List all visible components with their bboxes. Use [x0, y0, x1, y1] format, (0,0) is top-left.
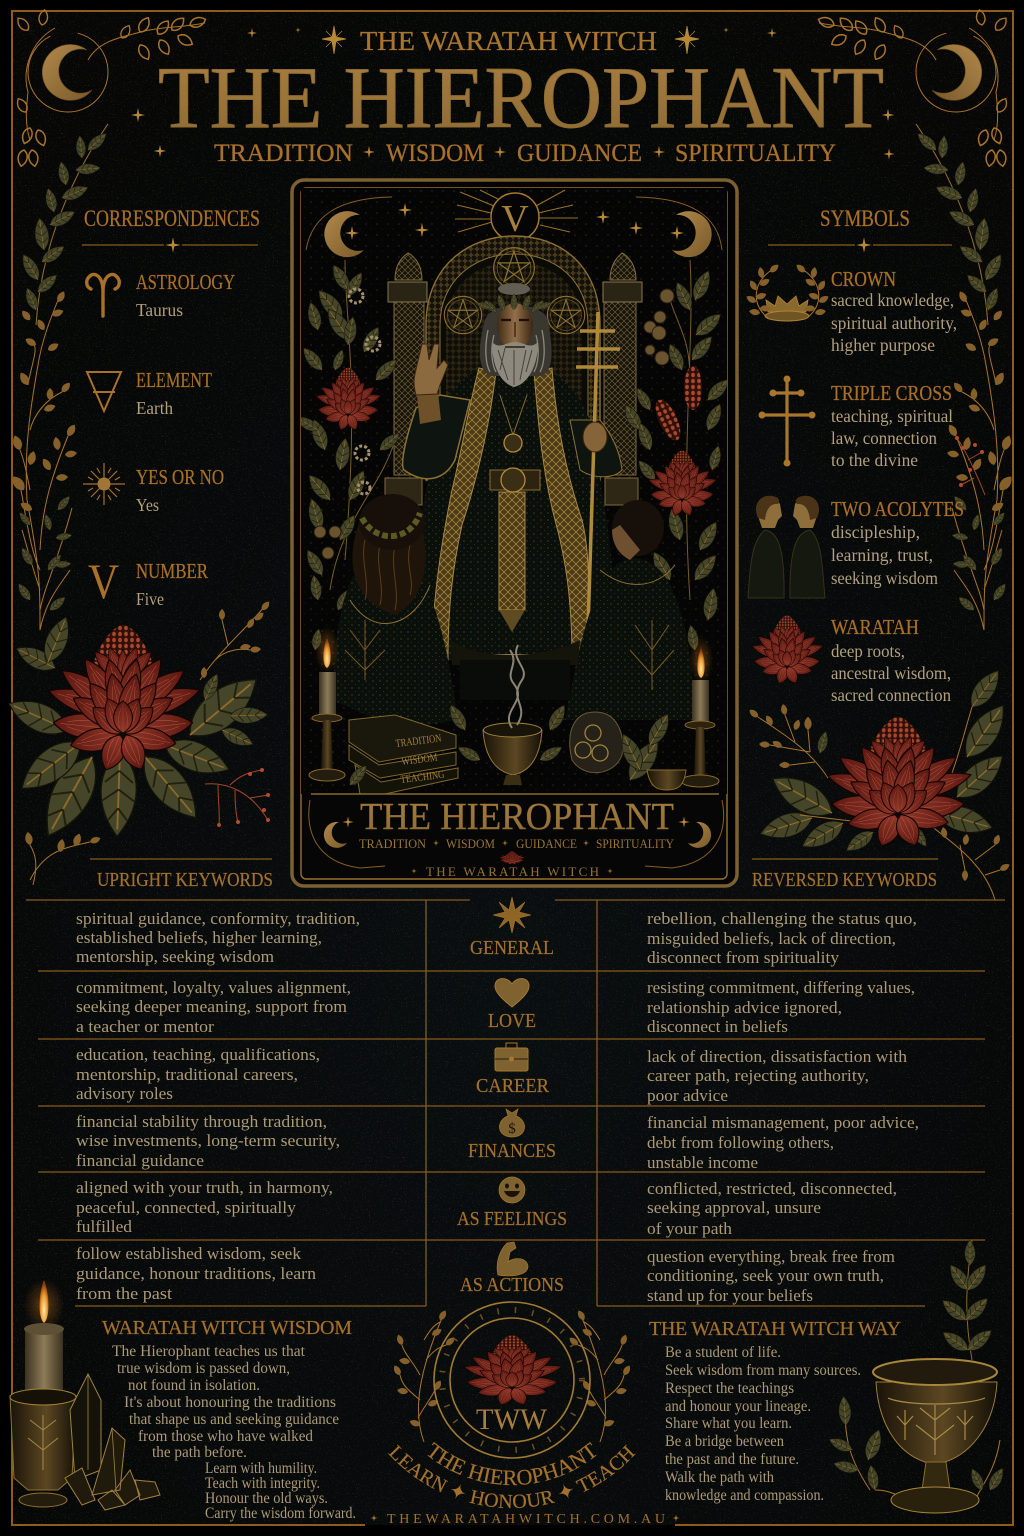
- way text: Share what you learn.: [665, 1415, 792, 1432]
- icon: crown with laurel: [745, 263, 830, 321]
- card artwork: [294, 188, 733, 794]
- tagline: TRADITION: [214, 140, 353, 167]
- card nameplate: THE HIEROPHANT: [360, 796, 674, 838]
- way text: and honour your lineage.: [665, 1398, 811, 1415]
- row: as feelings: aligned with your truth, in harmony,: [76, 1178, 333, 1197]
- heading: THE WARATAH WITCH WAY: [649, 1318, 901, 1340]
- raised hand: [414, 344, 448, 424]
- corner ornament: right moon: [817, 9, 1009, 167]
- row: finances: FINANCES: [468, 1140, 556, 1162]
- triple cross: TRIPLE CROSS: [831, 381, 952, 405]
- row: general: misguided beliefs, lack of direction,: [647, 929, 896, 948]
- bottom-right leaves and chalice: [827, 1240, 1007, 1513]
- icon: briefcase: [495, 1043, 528, 1071]
- triple cross: [831, 381, 953, 470]
- panel: waratah witch wisdom: [102, 1317, 356, 1522]
- row: finances: wise investments, long-term security,: [76, 1131, 340, 1150]
- crown: [831, 267, 957, 355]
- way text: Respect the teachings: [665, 1380, 794, 1397]
- wisdom text: The Hierophant teaches us that: [112, 1343, 306, 1360]
- throne arch: [426, 236, 600, 480]
- row: as feelings: [76, 1177, 897, 1238]
- card nameplate: [309, 796, 724, 879]
- heading: WARATAH WITCH WISDOM: [102, 1317, 352, 1339]
- icon: header star left: [322, 26, 346, 54]
- card nameplate: THE WARATAH WITCH: [426, 864, 599, 879]
- row: love: resisting commitment, differing values,: [647, 978, 915, 997]
- wisdom text: that shape us and seeking guidance: [129, 1411, 339, 1428]
- row: general: rebellion, challenging the status quo,: [647, 909, 917, 928]
- astrology: ASTROLOGY: [136, 270, 235, 294]
- stacked books: WISDOM: [401, 752, 438, 768]
- foliage left: [301, 260, 399, 650]
- panel: reversed keywords heading: REVERSED KEYWORDS: [752, 869, 937, 891]
- two acolytes: TWO ACOLYTES: [831, 497, 964, 521]
- panel: upright keywords heading: UPRIGHT KEYWORDS: [97, 869, 273, 891]
- tagline: GUIDANCE: [517, 140, 642, 167]
- number: Five: [136, 589, 164, 609]
- header: [158, 26, 884, 167]
- tarot card: [292, 180, 737, 886]
- row: general: GENERAL: [470, 937, 554, 959]
- two acolytes: [831, 497, 964, 588]
- waratah: ancestral wisdom,: [831, 663, 951, 683]
- row: as feelings: conflicted, restricted, disconnected,: [647, 1179, 897, 1198]
- row: finances: financial mismanagement, poor advice,: [647, 1113, 919, 1132]
- row: general: established beliefs, higher learning,: [76, 928, 322, 947]
- icon: aries: [87, 274, 119, 316]
- triple cross: law, connection: [831, 428, 937, 448]
- emblem flower: [462, 1335, 564, 1407]
- large waratah right: [748, 665, 1014, 900]
- row: career: mentorship, traditional careers,: [76, 1065, 298, 1084]
- emblem left sprig: [392, 1309, 456, 1442]
- row: as feelings: peaceful, connected, spiritually: [76, 1198, 297, 1217]
- card nameplate: TRADITION: [359, 836, 427, 851]
- row: general: mentorship, seeking wisdom: [76, 947, 274, 966]
- row: love: a teacher or mentor: [76, 1017, 214, 1036]
- icon: sun: [83, 463, 125, 505]
- row: love: disconnect in beliefs: [647, 1017, 788, 1036]
- triple cross: teaching, spiritual: [831, 406, 953, 426]
- table rules: [26, 900, 1005, 1306]
- wisdom text: the path before.: [152, 1444, 247, 1461]
- website: THEWARATAHWITCH.COM.AU: [387, 1512, 665, 1527]
- icon: money bag: [499, 1109, 525, 1137]
- panel: correspondences: [82, 206, 260, 609]
- icon: flexed arm: [497, 1242, 528, 1276]
- crown: CROWN: [831, 267, 896, 291]
- decorative stars: [131, 27, 895, 160]
- row: career: CAREER: [476, 1075, 550, 1097]
- keywords table: [26, 897, 1005, 1306]
- row: finances: [76, 1109, 919, 1172]
- large waratah left: [3, 600, 271, 885]
- row: general: spiritual guidance, conformity, tradition,: [76, 909, 360, 928]
- brand line: THE WARATAH WITCH: [360, 26, 657, 56]
- way text: knowledge and compassion.: [665, 1487, 824, 1504]
- roman numeral medallion: V: [501, 198, 529, 240]
- main title: THE HIEROPHANT: [158, 50, 884, 147]
- way text: [665, 1344, 861, 1504]
- astrology: Taurus: [136, 300, 183, 320]
- left margin vine: [9, 124, 110, 630]
- triple cross: to the divine: [831, 450, 918, 470]
- emblem monogram: TWW: [476, 1403, 548, 1436]
- throne columns: [385, 253, 642, 505]
- row: career: lack of direction, dissatisfaction with: [647, 1047, 908, 1066]
- right margin vine: [914, 124, 1015, 630]
- robe: [413, 364, 614, 660]
- wisdom text: Teach with integrity.: [205, 1475, 320, 1492]
- emblem arc title: THE HIEROPHANT: [428, 1442, 596, 1486]
- emblem right sprig: [568, 1309, 632, 1442]
- row: as actions: conditioning, seek your own truth,: [647, 1266, 884, 1285]
- emblem arc motto: LEARN ✦ HONOUR ✦ TEACH: [388, 1444, 636, 1508]
- row: as actions: question everything, break free from: [647, 1247, 895, 1266]
- staff with triple cross: [576, 312, 620, 624]
- icon: star: [493, 897, 531, 933]
- bottom-left candle and crystals: [10, 1279, 160, 1510]
- way text: Seek wisdom from many sources.: [665, 1362, 861, 1379]
- crown: sacred knowledge,: [831, 290, 954, 310]
- row: love: LOVE: [488, 1010, 536, 1032]
- row: love: [76, 978, 915, 1036]
- waratah: deep roots,: [831, 641, 905, 661]
- emblem rings: [434, 1302, 590, 1458]
- way text: Walk the path with: [665, 1469, 774, 1486]
- right hand: [583, 422, 607, 452]
- row: as actions: AS ACTIONS: [460, 1274, 564, 1296]
- two acolytes: discipleship,: [831, 522, 920, 542]
- number: NUMBER: [136, 559, 208, 583]
- wisdom text: not found in isolation.: [128, 1377, 260, 1394]
- icon: heart: [495, 979, 529, 1007]
- row: career: career path, rejecting authority,: [647, 1066, 869, 1085]
- row: career: poor advice: [647, 1086, 728, 1105]
- left sleeve: [403, 395, 470, 479]
- row: as feelings: fulfilled: [76, 1217, 133, 1236]
- right acolyte: [565, 500, 695, 720]
- row: love: relationship advice ignored,: [647, 998, 842, 1017]
- yes or no: YES OR NO: [136, 465, 224, 489]
- emblem: [370, 1301, 680, 1527]
- element: Earth: [136, 398, 173, 418]
- crown: spiritual authority,: [831, 313, 957, 333]
- row: general: disconnect from spirituality: [647, 948, 840, 967]
- row: as actions: from the past: [76, 1284, 172, 1303]
- carved stone: [570, 712, 623, 773]
- right sleeve: [570, 420, 622, 477]
- row: as feelings: of your path: [647, 1219, 733, 1238]
- card corners and moons: [306, 197, 722, 257]
- waratah: [831, 615, 951, 705]
- row: general: [76, 897, 917, 967]
- way text: Be a bridge between: [665, 1433, 784, 1450]
- row: as feelings: seeking approval, unsure: [647, 1198, 821, 1217]
- wisdom text: Learn with humility.: [205, 1460, 317, 1477]
- stacked books: TEACHING: [400, 769, 445, 786]
- icon: waratah: [751, 615, 825, 685]
- icon: header star right: [675, 26, 699, 54]
- icon: smiling face: [499, 1177, 525, 1203]
- icon: roman five: V: [88, 553, 119, 609]
- stacked books: [349, 715, 458, 794]
- hierophant figure: [403, 283, 622, 660]
- stacked books: TRADITION: [395, 732, 442, 750]
- element: [136, 368, 212, 418]
- heading: symbols: SYMBOLS: [820, 206, 910, 231]
- way text: the past and the future.: [665, 1451, 799, 1468]
- number: [136, 559, 208, 609]
- roman numeral medallion: [455, 190, 578, 241]
- two acolytes: learning, trust,: [831, 545, 933, 565]
- tagline: SPIRITUALITY: [675, 140, 836, 167]
- red berry sprig on right margin: [955, 436, 985, 495]
- row: as actions: follow established wisdom, seek: [76, 1244, 302, 1263]
- row: as feelings: AS FEELINGS: [457, 1208, 567, 1230]
- row: as actions: stand up for your beliefs: [647, 1286, 813, 1305]
- wisdom text: true wisdom is passed down,: [117, 1360, 290, 1377]
- astrology: [136, 270, 235, 320]
- corner ornament: left moon: [15, 9, 207, 167]
- waratah: WARATAH: [831, 615, 919, 639]
- card nameplate: GUIDANCE: [516, 836, 577, 851]
- icon: earth triangle: [87, 372, 121, 411]
- row: as actions: [76, 1242, 895, 1305]
- icon: two acolytes: [748, 496, 825, 598]
- wisdom text: Carry the wisdom forward.: [205, 1505, 356, 1522]
- card nameplate: WISDOM: [446, 836, 495, 851]
- row: love: commitment, loyalty, values alignment,: [76, 978, 351, 997]
- tagline: [214, 140, 836, 167]
- row: finances: financial stability through tradition,: [76, 1112, 327, 1131]
- card nameplate: SPIRITUALITY: [596, 836, 675, 851]
- right candle: [681, 636, 719, 787]
- wisdom text: from those who have walked: [138, 1428, 313, 1445]
- way text: Be a student of life.: [665, 1344, 781, 1361]
- fern and small bowl: [346, 710, 686, 790]
- yes or no: [136, 465, 224, 515]
- tagline: WISDOM: [386, 140, 484, 167]
- row: finances: unstable income: [647, 1153, 758, 1172]
- panel: symbols: [745, 206, 964, 705]
- icon: triple cross: [759, 376, 815, 466]
- wisdom text: [112, 1343, 356, 1522]
- foliage right: [620, 260, 733, 651]
- wisdom text: Honour the old ways.: [205, 1490, 328, 1507]
- gold stoles: [432, 368, 589, 660]
- crown: higher purpose: [831, 335, 935, 355]
- row: career: advisory roles: [76, 1084, 173, 1103]
- row: career: education, teaching, qualifications,: [76, 1045, 320, 1064]
- panel: the waratah witch way: [649, 1318, 901, 1504]
- left candle: [309, 626, 345, 781]
- element: ELEMENT: [136, 368, 212, 392]
- row: finances: debt from following others,: [647, 1133, 834, 1152]
- left acolyte: [332, 494, 458, 730]
- two acolytes: seeking wisdom: [831, 568, 938, 588]
- yes or no: Yes: [136, 495, 159, 515]
- row: love: seeking deeper meaning, support from: [76, 997, 347, 1016]
- icon: money bag: $: [508, 1121, 516, 1137]
- wisdom text: It's about honouring the traditions: [124, 1394, 336, 1411]
- head: [475, 283, 553, 387]
- waratah: sacred connection: [831, 685, 951, 705]
- row: as actions: guidance, honour traditions, learn: [76, 1264, 317, 1283]
- heading: correspondences: CORRESPONDENCES: [84, 206, 260, 231]
- row: career: [76, 1043, 908, 1105]
- stone steps and hem: [445, 640, 580, 765]
- chalice with smoke: [483, 645, 542, 785]
- row: finances: financial guidance: [76, 1151, 204, 1170]
